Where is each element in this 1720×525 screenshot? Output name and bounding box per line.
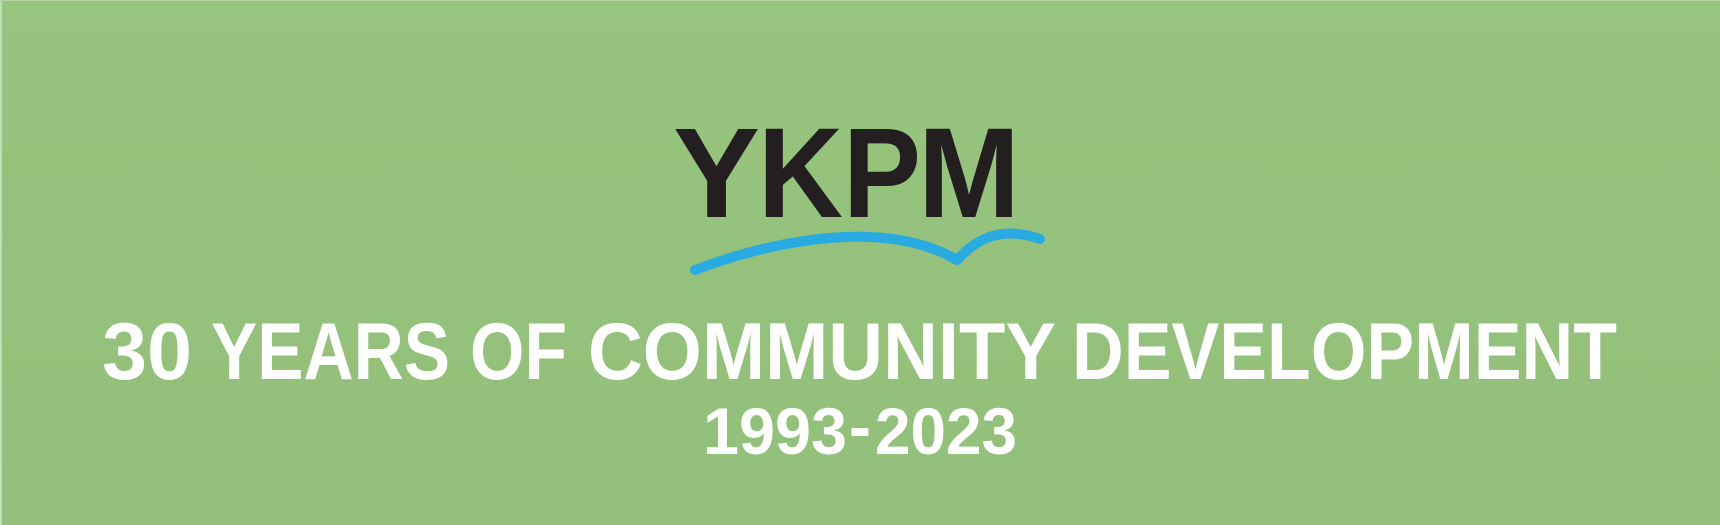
logo: YKPM wordmark: M <box>918 102 1020 245</box>
date range: 2023 <box>875 394 1017 468</box>
logo: blue swoosh <box>695 234 1040 270</box>
title: YEARS <box>211 307 450 397</box>
date range <box>703 389 1017 468</box>
date range: - <box>849 389 871 463</box>
title: COMMUNITY <box>588 307 1056 397</box>
title: OF <box>470 307 567 397</box>
title <box>102 307 1617 397</box>
logo: YKPM wordmark <box>673 102 1020 245</box>
logo: YKPM wordmark: K <box>758 102 843 245</box>
date range: 1993 <box>703 394 847 468</box>
logo: YKPM wordmark: P <box>843 102 921 245</box>
title: DEVELOPMENT <box>1072 307 1617 397</box>
logo: YKPM wordmark: Y <box>673 102 760 245</box>
title: 30 <box>102 307 192 397</box>
